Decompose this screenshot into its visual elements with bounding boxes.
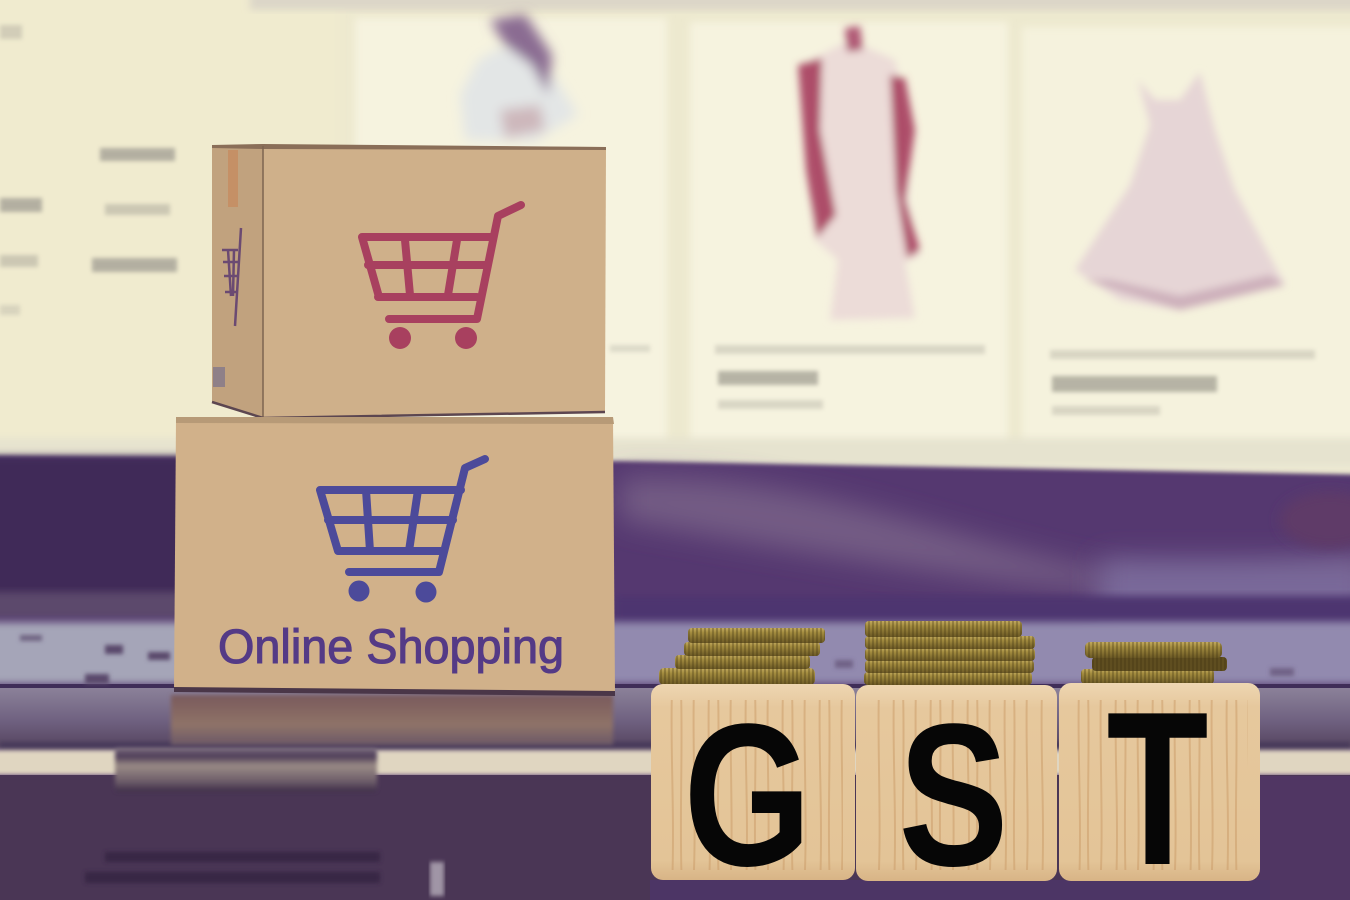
wooden block G [651, 682, 855, 900]
lower cardboard box [174, 417, 615, 696]
box reflection on laptop [171, 695, 613, 745]
coins above S [864, 621, 1035, 685]
coins above T [1081, 642, 1227, 684]
blurred model in white shirt [460, 14, 578, 142]
wooden block T [1059, 667, 1260, 900]
icon: blue shopping cart [320, 459, 485, 602]
coin stacks [659, 621, 1227, 685]
blurred red dress [798, 26, 920, 320]
blurred pink dress [1075, 72, 1285, 310]
blurred keyboard keys and hinge [20, 635, 1294, 896]
laptop body background [0, 456, 1350, 900]
blurred laptop screen background [0, 0, 1350, 480]
coins above G [659, 628, 825, 685]
icon: small side cart [222, 228, 241, 326]
label: Online Shopping: Online Shopping [218, 621, 564, 674]
blurred product captions [610, 345, 1315, 415]
upper cardboard box [212, 144, 606, 418]
blurred screen text left column [0, 25, 177, 315]
icon: red shopping cart [362, 205, 521, 349]
wooden block S [856, 682, 1057, 900]
